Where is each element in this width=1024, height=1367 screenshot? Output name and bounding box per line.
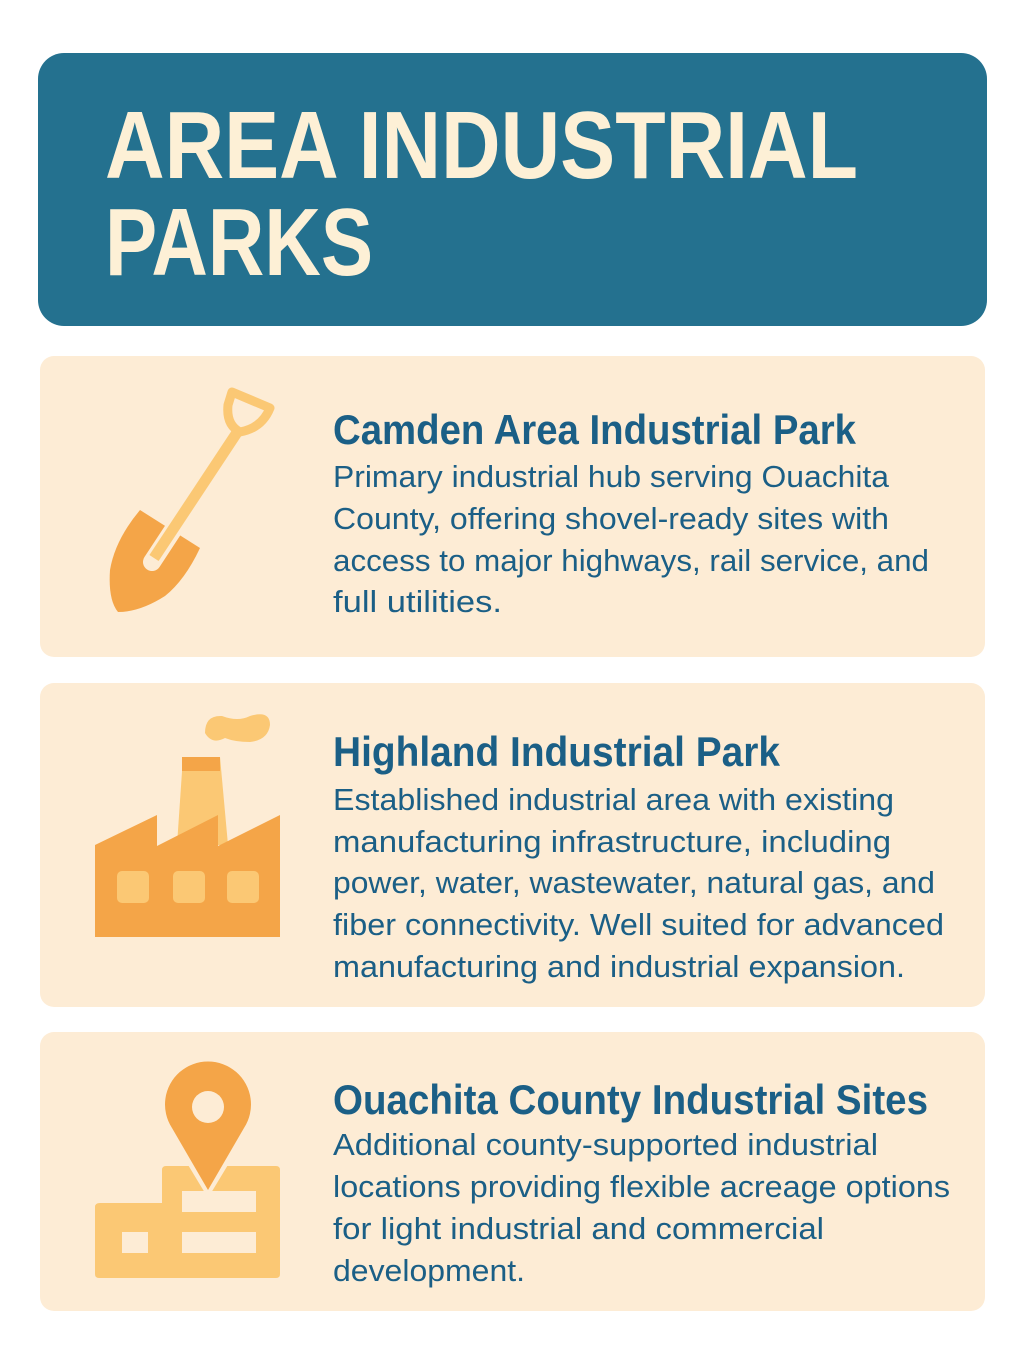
text block: Established industrial area with existing [333,782,894,817]
panel: Camden Area Industrial Park [40,356,985,657]
text block: power, water, wastewater, natural gas, and [333,865,935,900]
text block: manufacturing and industrial expansion. [333,949,905,984]
text block: development. [333,1253,525,1288]
text block: full utilities. [333,584,502,619]
panel: Ouachita County Industrial Sites [40,1032,985,1311]
text block [333,1127,950,1288]
icon: factory [95,714,280,937]
title: AREA INDUSTRIAL [105,92,858,199]
text block [333,782,944,984]
text block: manufacturing infrastructure, including [333,824,891,859]
title banner [38,53,987,326]
title [105,92,858,296]
text block: Additional county-supported industrial [333,1127,878,1162]
text block [333,459,929,619]
icon: map pin with site [95,1054,280,1278]
text block: locations providing flexible acreage options [333,1169,950,1204]
text block: County, offering shovel-ready sites with [333,501,889,536]
text block: fiber connectivity. Well suited for advanced [333,907,944,942]
text block: Primary industrial hub serving Ouachita [333,459,890,494]
heading: Ouachita County Industrial Sites [333,1076,928,1123]
icon: shovel [110,392,270,612]
text block: for light industrial and commercial [333,1211,824,1246]
heading: Camden Area Industrial Park [333,406,857,453]
heading: Highland Industrial Park [333,728,781,775]
panel: Highland Industrial Park [40,683,985,1007]
title: PARKS [105,189,373,296]
text block: access to major highways, rail service, and [333,543,929,578]
